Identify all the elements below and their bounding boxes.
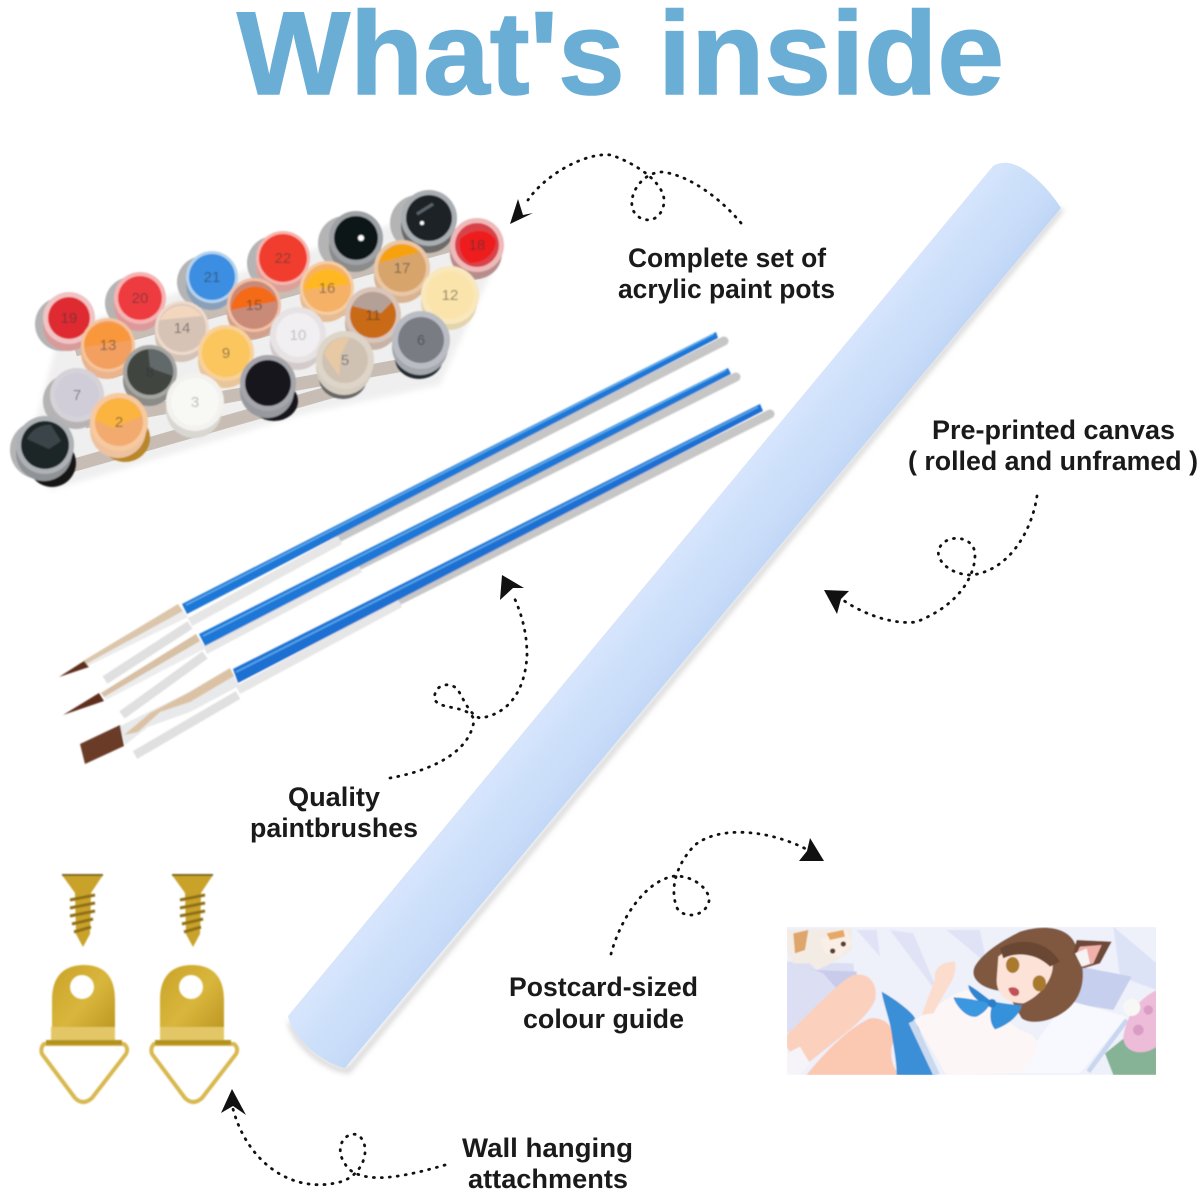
guide background bbox=[787, 927, 1157, 1075]
arrow: to paintbrushes bbox=[390, 575, 527, 778]
canvas shadow bbox=[290, 209, 1062, 1071]
label: paintbrushes: Quality bbox=[288, 782, 380, 812]
brush shadows bbox=[105, 341, 770, 755]
pot 22: 22 bbox=[275, 250, 291, 267]
pot 4 bbox=[240, 355, 298, 421]
screw 1 bbox=[62, 875, 103, 947]
pot 19 bbox=[35, 292, 95, 351]
pot 1 top bbox=[390, 190, 457, 253]
pot 15 bbox=[227, 278, 281, 339]
pot 13 bbox=[81, 318, 135, 379]
guide eyes and mouth bbox=[1006, 957, 1046, 996]
pot 2 bbox=[90, 393, 150, 462]
pot 9: 9 bbox=[222, 345, 230, 362]
icon: wall hanging screws bbox=[62, 875, 213, 947]
label: paint pots: Complete set of bbox=[628, 243, 827, 273]
pot 9 bbox=[198, 325, 254, 388]
arrow: to canvas bbox=[824, 496, 1037, 622]
label: wall hanging: Wall hanging bbox=[462, 1133, 633, 1163]
pot 16 bbox=[300, 261, 354, 322]
hanger 1 bbox=[41, 965, 127, 1102]
label: colour guide: Postcard-sized bbox=[509, 972, 698, 1002]
pot 22 bbox=[247, 231, 310, 292]
pot 14 bbox=[155, 301, 209, 362]
icon: paintbrushes bbox=[59, 332, 770, 764]
label: canvas: ( rolled and unframed ) bbox=[908, 446, 1198, 476]
arrow: to paint pots bbox=[510, 155, 741, 224]
pot 1 bottom bbox=[10, 416, 76, 487]
pot 15: 15 bbox=[246, 297, 262, 314]
pot 20 bbox=[105, 272, 166, 331]
guide hair bbox=[973, 928, 1083, 1022]
pot 14: 14 bbox=[174, 320, 190, 337]
canvas body bbox=[288, 163, 1061, 1068]
pot 21: 21 bbox=[204, 269, 220, 286]
pot 16: 16 bbox=[319, 280, 335, 297]
arrow: to wall hanging bbox=[221, 1089, 445, 1185]
pot 3: 3 bbox=[191, 394, 199, 411]
label: wall hanging: attachments bbox=[468, 1164, 628, 1194]
pot 5: 5 bbox=[341, 352, 349, 369]
screw 2 bbox=[172, 875, 213, 947]
label: canvas bbox=[908, 415, 1198, 476]
pot 10: 10 bbox=[290, 327, 306, 344]
guide shirt bbox=[913, 990, 1038, 1075]
pot 17 bbox=[374, 240, 430, 303]
pot 6: 6 bbox=[417, 332, 425, 349]
guide cat ear bbox=[1073, 940, 1112, 968]
pot 13: 13 bbox=[100, 337, 116, 354]
pot 5 bbox=[316, 331, 374, 399]
hanger 2 bbox=[151, 965, 237, 1102]
label: canvas: Pre-printed canvas bbox=[932, 415, 1175, 445]
pot 3 bbox=[166, 373, 224, 438]
guide cat bbox=[787, 928, 852, 970]
paint pot tray and shadow bbox=[30, 215, 495, 490]
pot 12 bbox=[421, 266, 479, 330]
arrowhead wall hanging bbox=[221, 1089, 246, 1115]
arrowhead colour guide bbox=[799, 838, 824, 861]
arrowhead canvas bbox=[824, 590, 849, 614]
pot 11: 11 bbox=[365, 307, 381, 324]
arrowhead paint pots bbox=[510, 199, 533, 224]
pot 18 bbox=[450, 218, 504, 279]
guide bow bbox=[953, 985, 1022, 1029]
icon: paint pots set bbox=[10, 190, 504, 490]
pot 21 bbox=[177, 251, 238, 310]
guide arm bbox=[922, 962, 955, 1015]
pot 7: 7 bbox=[73, 387, 81, 404]
guide face bbox=[997, 948, 1053, 1003]
guide legs bbox=[787, 974, 900, 1075]
arrow: to colour guide bbox=[611, 832, 824, 954]
guide flowers bbox=[1105, 990, 1157, 1075]
colour guide image bbox=[787, 927, 1157, 1075]
pot black bbox=[318, 211, 383, 272]
pot 6 bbox=[392, 311, 450, 379]
pot 19: 19 bbox=[61, 310, 77, 327]
label: paintbrushes bbox=[250, 782, 418, 843]
label: wall hanging bbox=[462, 1133, 633, 1194]
pot 20: 20 bbox=[132, 290, 148, 307]
guide skirt bbox=[882, 992, 937, 1075]
arrowhead paintbrushes bbox=[500, 575, 524, 600]
pot 10 bbox=[270, 307, 326, 370]
icon: D-ring hangers bbox=[41, 965, 237, 1102]
pot 17: 17 bbox=[394, 260, 410, 277]
brush 3 bbox=[80, 404, 763, 764]
brush 1 bbox=[59, 332, 718, 677]
label: paint pots: acrylic paint pots bbox=[618, 274, 835, 304]
icon: rolled canvas bbox=[288, 163, 1062, 1071]
pot 8 bbox=[123, 345, 177, 406]
label: paint pots bbox=[618, 243, 835, 304]
brush 2 bbox=[63, 368, 731, 715]
label: colour guide bbox=[509, 972, 698, 1034]
pot 11 bbox=[345, 287, 401, 350]
label: colour guide: colour guide bbox=[523, 1004, 684, 1034]
pot 8: 8 bbox=[146, 364, 154, 381]
pot 12: 12 bbox=[442, 287, 458, 304]
pot 18: 18 bbox=[469, 237, 485, 254]
pot 7 bbox=[43, 368, 104, 429]
label: paintbrushes: paintbrushes bbox=[250, 813, 418, 843]
pot 2: 2 bbox=[115, 414, 123, 431]
